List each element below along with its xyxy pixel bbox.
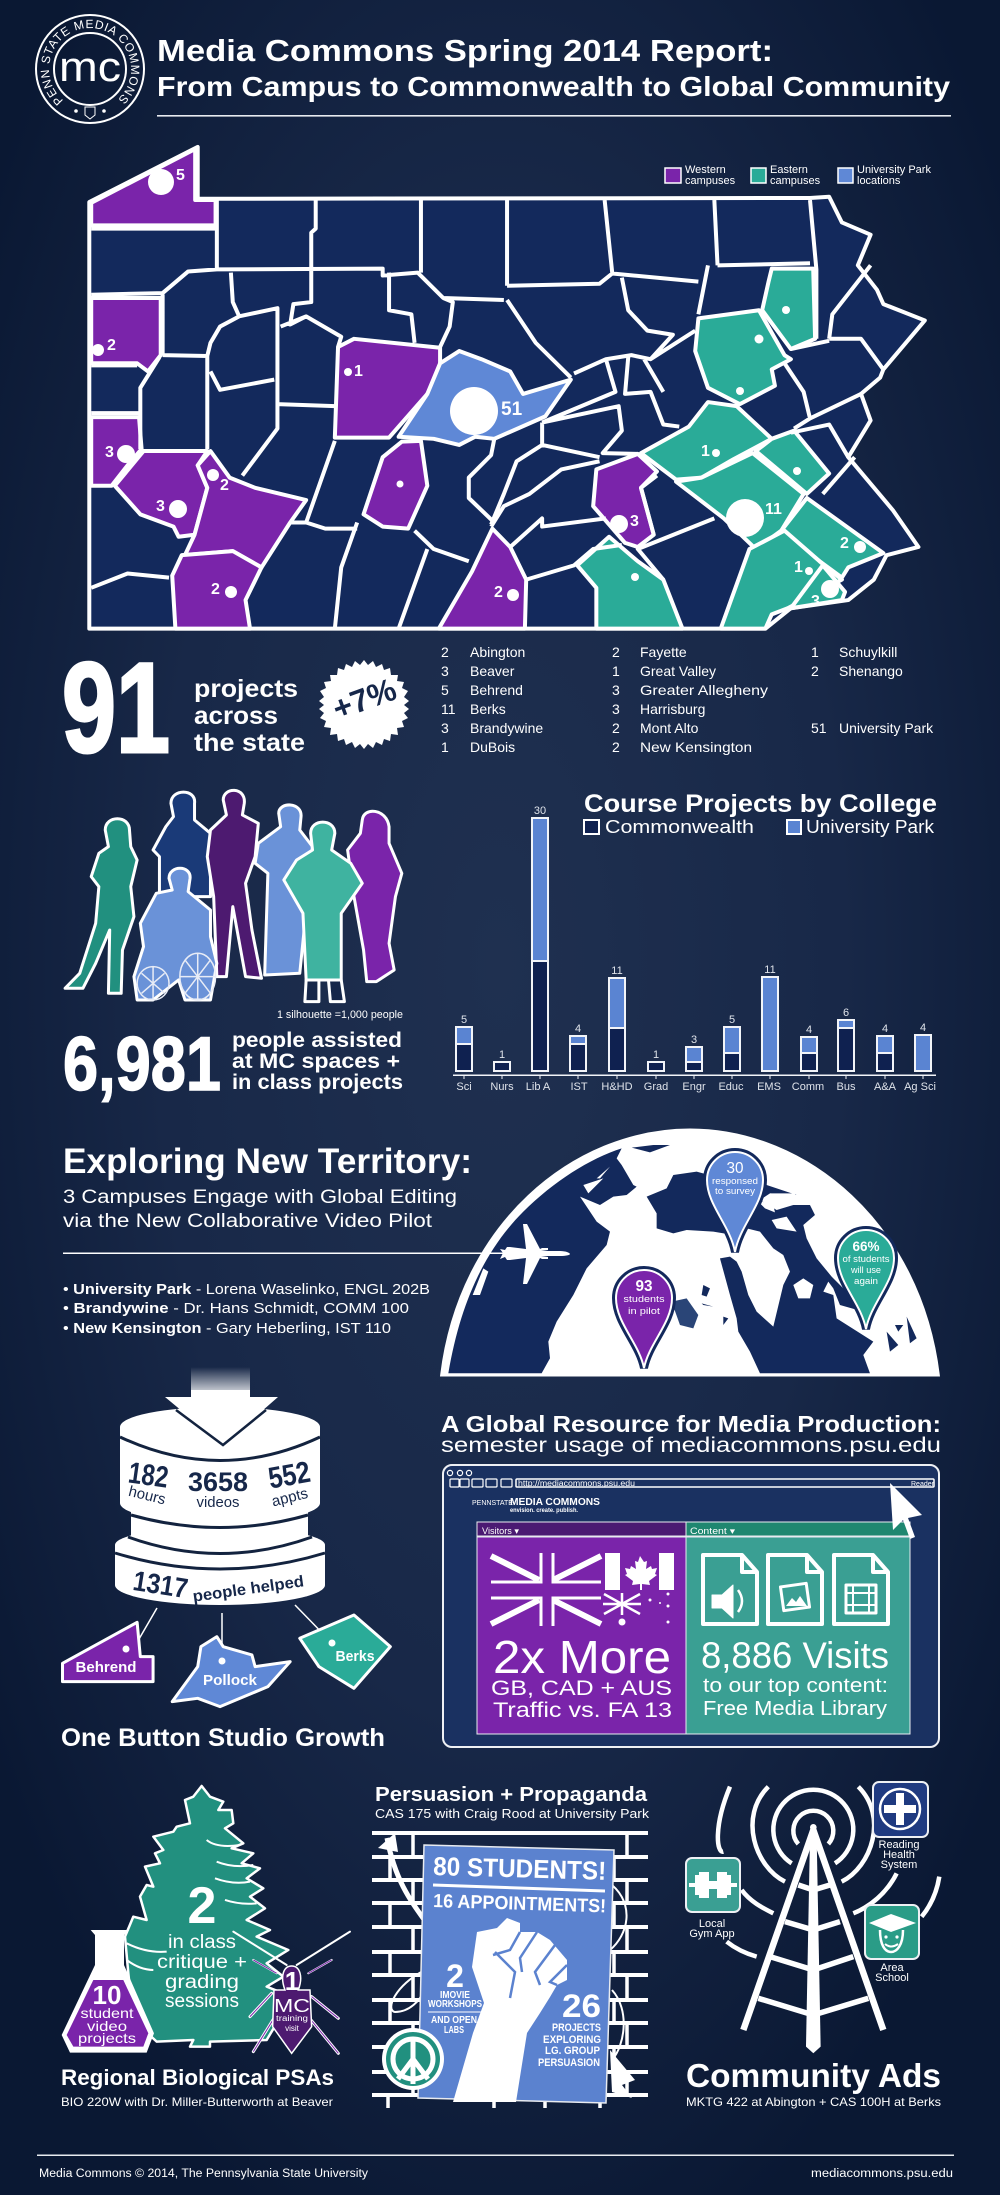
pin: 93 students in pilot: [616, 1270, 672, 1368]
stat: 6,981 people assisted: [63, 1022, 403, 1107]
campus project list: Harrisburg: [640, 701, 705, 717]
eastern campus counties: [577, 269, 883, 629]
campus project list: Mont Alto: [640, 720, 699, 736]
map markers and project counts: 3: [630, 513, 639, 530]
bar chart: course projects by college: 1: [653, 1049, 659, 1061]
one button studio stacked cylinder: people helped: [192, 1573, 305, 1606]
map markers and project counts: 51: [501, 399, 523, 420]
poster: 80 students, 16 appointments: PERSUASION: [538, 2057, 600, 2069]
campus project list: Fayette: [640, 644, 687, 660]
bar chart: course projects by college: [453, 805, 936, 1093]
flask: 10 student video projects: projects: [78, 2030, 136, 2046]
campus project list: Abington: [470, 644, 525, 660]
map markers and project counts: 1: [794, 559, 803, 576]
bar chart: course projects by college: Educ: [718, 1081, 744, 1093]
stat: 6,981 people assisted: at MC spaces +: [232, 1050, 400, 1073]
bar chart: course projects by college: 4: [806, 1024, 812, 1036]
campus project list: 11: [441, 701, 456, 717]
bar chart: course projects by college: Engr: [682, 1081, 706, 1093]
icon: local gym app: Local: [699, 1918, 725, 1930]
content panel: Free Media Library: [703, 1698, 887, 1720]
visitors tab: [477, 1522, 686, 1536]
bar chart: course projects by college: A&A: [874, 1081, 897, 1093]
poster: 80 students, 16 appointments: LABS: [444, 2025, 464, 2036]
browser window: envision. create. publish.: [510, 1508, 578, 1514]
campus project list: 2: [612, 720, 620, 736]
heading: Persuasion + Propaganda: CAS 175 with Craig Rood at University Park: [375, 1806, 650, 1821]
studio locations: Behrend, Pollock, Berks: Behrend: [76, 1659, 136, 1676]
bar chart: course projects by college: Ag Sci: [904, 1081, 936, 1093]
bar chart: course projects by college: 11: [611, 965, 623, 977]
chart heading and legend: Course Projects by College: [584, 790, 937, 818]
cursor: [890, 1483, 922, 1539]
flask: 10 student video projects: [62, 1930, 154, 2053]
campus project list: 51: [811, 720, 827, 736]
map legend: campuses: [685, 175, 736, 187]
western campus counties: [91, 149, 657, 629]
poster: 80 students, 16 appointments: EXPLORING: [543, 2034, 601, 2046]
bar chart: course projects by college: 4: [882, 1023, 888, 1035]
heading: A Global Resource for Media Production: [441, 1411, 941, 1457]
bar chart: course projects by college: 30: [534, 805, 546, 817]
pin: 93 students in pilot: in pilot: [628, 1306, 661, 1316]
beetle: 1 MC training visit: 1: [285, 1966, 299, 1996]
icon: local gym app: [686, 1858, 740, 1940]
radio tower with signal arcs: [718, 1787, 939, 2053]
map markers and project counts: 5: [176, 167, 185, 184]
tree with text: 2 in class critique + grading sessions: sessions: [165, 1991, 239, 2012]
icon: peace sticker: [382, 2028, 444, 2090]
stat: 91 projects: 91: [62, 637, 170, 780]
bar chart: course projects by college: 6: [843, 1007, 849, 1019]
state base: [89, 147, 925, 629]
campus project list: 3: [441, 663, 449, 679]
heading: Exploring New Territory: 3 Campuses Engage with Global Editing: [63, 1187, 457, 1208]
browser window: http://mediacommons.psu.edu: [518, 1479, 635, 1488]
map markers and project counts: 2: [211, 581, 220, 598]
beetle: 1 MC training visit: visit: [285, 2024, 300, 2033]
bar chart: course projects by college: 5: [729, 1014, 735, 1026]
campus project list: Greater Allegheny: [640, 682, 768, 698]
flask: 10 student video projects: 10: [93, 1980, 121, 2010]
bar chart: course projects by college: 1: [499, 1049, 505, 1061]
campus project list: Shenango: [839, 663, 903, 679]
bar chart: course projects by college: EMS: [757, 1081, 781, 1093]
campus project list: 2: [612, 739, 620, 755]
campus project list: 1: [811, 644, 819, 660]
University Park county: [399, 351, 571, 445]
heading: Persuasion + Propaganda: [375, 1784, 650, 1821]
flask: 10 student video projects: student: [80, 2005, 134, 2021]
title: [157, 33, 951, 117]
heading: Regional Biological PSAs: Regional Biological PSAs: [61, 2065, 334, 2090]
visitors panel: [477, 1537, 686, 1734]
bar chart: course projects by college: 5: [461, 1014, 467, 1026]
map legend: Western: [685, 164, 726, 176]
icon: area school: [865, 1905, 919, 1984]
heading: Community Ads: MKTG 422 at Abington + CAS 100H at Berks: [686, 2095, 941, 2109]
pin: 30 responded to survey: [707, 1152, 763, 1252]
heading: Exploring New Territory: via the New Collaborative Video Pilot: [63, 1211, 433, 1232]
map markers and project counts: 2: [107, 337, 116, 354]
poster: 80 students, 16 appointments: 2: [446, 1958, 464, 1994]
map markers and project counts: 1: [701, 443, 710, 460]
campus project list: 2: [612, 644, 620, 660]
bar chart: course projects by college: Sci: [456, 1081, 472, 1093]
poster: 80 students, 16 appointments: LG. GROUP: [545, 2045, 600, 2057]
map markers and project counts: 2: [840, 535, 849, 552]
bar chart: course projects by college: Comm: [792, 1081, 824, 1093]
tree with text: 2 in class critique + grading sessions: grading: [165, 1972, 239, 1993]
stat: 91 projects: the state: [194, 729, 305, 757]
campus project list: Beaver: [470, 663, 515, 679]
poster: 80 students, 16 appointments: 80 STUDENTS!: [433, 1851, 607, 1886]
campus project list: 3: [441, 720, 449, 736]
campus project list: 1: [441, 739, 449, 755]
one button studio stacked cylinder: 182: [126, 1456, 170, 1495]
one button studio stacked cylinder: 1317: [131, 1565, 190, 1604]
heading: A Global Resource for Media Production: semester usage of mediacommons.psu.edu: [441, 1434, 941, 1457]
pilot campus list: • Brandywine - Dr. Hans Schmidt, COMM 100: [63, 1300, 409, 1317]
bar chart: course projects by college: 4: [920, 1022, 926, 1034]
campus project list: 3: [612, 701, 620, 717]
chart heading and legend: University Park: [806, 817, 935, 837]
poster: 80 students, 16 appointments: 26: [562, 1988, 601, 2024]
visitors panel: GB, CAD + AUS: [491, 1677, 672, 1700]
silhouettes of people: [65, 790, 402, 1002]
pin: 93 students in pilot: students: [624, 1294, 665, 1304]
campus project list: Behrend: [470, 682, 523, 698]
map markers and project counts: 2: [494, 584, 503, 601]
icon: airplane and flight line: [63, 1224, 570, 1284]
one button studio stacked cylinder: videos: [196, 1494, 240, 1511]
flask: 10 student video projects: video: [87, 2018, 127, 2034]
bar chart: course projects by college: Nurs: [490, 1081, 514, 1093]
icon: reading health system: Reading: [879, 1839, 919, 1851]
map legend: [665, 164, 931, 187]
icon: local gym app: Gym App: [689, 1928, 735, 1940]
arrow into cylinder: [165, 1390, 278, 1445]
pilot campus list: • University Park - Lorena Waselinko, ENGL 202B: [63, 1281, 430, 1298]
one button studio stacked cylinder: 3658: [188, 1467, 248, 1497]
beetle: 1 MC training visit: MC: [274, 1996, 310, 2016]
campus project list: Brandywine: [470, 720, 543, 736]
map legend: locations: [857, 175, 901, 187]
content panel: to our top content:: [703, 1675, 888, 1697]
bar chart: course projects by college: IST: [570, 1081, 588, 1093]
heading: Regional Biological PSAs: BIO 220W with Dr. Miller-Butterworth at Beaver: [61, 2095, 333, 2109]
studio locations: Behrend, Pollock, Berks: Pollock: [203, 1672, 258, 1689]
pin: 66% of students will use again: [838, 1230, 894, 1329]
chart heading and legend: [584, 790, 937, 837]
one button studio stacked cylinder: appts: [270, 1485, 310, 1510]
tree with text: 2 in class critique + grading sessions: critique +: [157, 1952, 247, 1973]
pin: 93 students in pilot: 93: [636, 1278, 653, 1295]
logo: Penn State Media Commons seal: PENN STATE MEDIA COMMONS: [40, 20, 140, 106]
browser window: Content ▾: [690, 1526, 736, 1536]
poster: 80 students, 16 appointments: PROJECTS: [552, 2022, 601, 2034]
stat: 6,981 people assisted: 6,981: [63, 1022, 221, 1107]
badge: +7%: +7%: [328, 671, 401, 727]
poster: 80 students, 16 appointments: [418, 1845, 614, 2103]
bar chart: course projects by college: 4: [575, 1023, 581, 1035]
silhouette scale note: 1 silhouette =1,000 people: [277, 1009, 403, 1021]
chart heading and legend: Commonwealth: [605, 817, 754, 837]
poster: 80 students, 16 appointments: WORKSHOPS: [428, 1999, 482, 2010]
browser window: PENNSTATE: [472, 1500, 513, 1507]
title: From Campus to Commonwealth to Global Community: [157, 71, 950, 102]
pin: 66% of students will use again: 66%: [852, 1238, 880, 1254]
campus project list: Berks: [470, 701, 506, 717]
pin: 30 responded to survey: 30: [726, 1160, 744, 1177]
campus project list: New Kensington: [640, 739, 752, 755]
campus project list: 2: [441, 644, 449, 660]
beetle: 1 MC training visit: [233, 1932, 350, 2053]
campus project list: Great Valley: [640, 663, 716, 679]
campus project list: [441, 644, 934, 755]
stat: 91 projects: across: [194, 702, 278, 730]
map legend: campuses: [770, 175, 821, 187]
footer: mediacommons.psu.edu: [811, 2168, 953, 2180]
bar chart: course projects by college: 3: [691, 1034, 697, 1046]
pin: 66% of students will use again: of students: [842, 1254, 890, 1264]
stat: 91 projects: [62, 637, 305, 780]
map markers and project counts: 3: [811, 593, 820, 610]
stat: 91 projects: projects: [194, 675, 298, 703]
campus project list: 2: [811, 663, 819, 679]
icon: raised fist: [453, 1918, 567, 2102]
tree with text: 2 in class critique + grading sessions: in class: [168, 1932, 236, 1953]
content panel: 8,886 Visits: [701, 1635, 889, 1676]
icon: area school: School: [875, 1972, 909, 1984]
heading: Exploring New Territory: [63, 1142, 472, 1232]
browser window: MEDIA COMMONS: [510, 1497, 600, 1508]
content panel: [686, 1537, 910, 1734]
beetle: 1 MC training visit: training: [276, 2014, 308, 2023]
one button studio stacked cylinder: hours: [127, 1483, 167, 1508]
map markers and project counts: 2: [220, 477, 229, 494]
pin: 66% of students will use again: will use: [850, 1265, 881, 1275]
brick wall with graffiti: [372, 1833, 648, 2108]
pin: 30 responded to survey: responsed: [712, 1176, 758, 1186]
globe: [442, 1130, 938, 1375]
map legend: University Park: [857, 164, 931, 176]
bar chart: course projects by college: Bus: [837, 1081, 856, 1093]
footer: [37, 2154, 954, 2180]
poster: 80 students, 16 appointments: IMOVIE: [440, 1990, 470, 2001]
visitors panel: 2x More: [493, 1631, 671, 1683]
visitors panel: Traffic vs. FA 13: [493, 1699, 672, 1722]
bar chart: course projects by college: H&HD: [601, 1081, 633, 1093]
bar chart: course projects by college: Grad: [644, 1081, 668, 1093]
pin: 66% of students will use again: again: [854, 1276, 878, 1286]
campus project list: DuBois: [470, 739, 515, 755]
stat: 6,981 people assisted: people assisted: [232, 1029, 402, 1052]
map legend: Eastern: [770, 164, 808, 176]
bar chart: course projects by college: Lib A: [526, 1081, 551, 1093]
map markers and project counts: 3: [105, 444, 114, 461]
campus project list: 1: [612, 663, 620, 679]
badge: +7%: [319, 660, 409, 749]
heading: One Button Studio Growth: One Button Studio Growth: [61, 1724, 385, 1752]
content tab: [686, 1522, 910, 1536]
icon: area school: Area: [880, 1962, 904, 1974]
studio locations: Behrend, Pollock, Berks: Berks: [336, 1648, 374, 1665]
one button studio stacked cylinder: [115, 1367, 325, 1606]
campus project list: 5: [441, 682, 449, 698]
icon: reading health system: Health: [883, 1849, 915, 1861]
heading: Community Ads: Community Ads: [686, 2057, 941, 2094]
one button studio stacked cylinder: 552: [266, 1456, 313, 1496]
poster: 80 students, 16 appointments: 16 APPOINTMENTS!: [433, 1891, 606, 1917]
stat: 6,981 people assisted: in class projects: [232, 1071, 403, 1094]
icon: reading health system: [873, 1782, 928, 1871]
map markers and project counts: 1: [354, 363, 363, 380]
studio locations: Behrend, Pollock, Berks: [63, 1605, 390, 1707]
tree with text: 2 in class critique + grading sessions: [125, 1786, 288, 2047]
heading: Persuasion + Propaganda: Persuasion + Propaganda: [375, 1784, 648, 1806]
icon: reading health system: System: [881, 1859, 917, 1871]
map markers and project counts: [92, 167, 866, 610]
map markers and project counts: 3: [156, 498, 165, 515]
bar chart: course projects by college: 11: [764, 964, 776, 976]
browser window: Visitors ▾: [482, 1526, 519, 1536]
poster: 80 students, 16 appointments: AND OPEN: [431, 2015, 477, 2026]
title: Media Commons Spring 2014 Report:: [157, 33, 773, 68]
footer: Media Commons © 2014, The Pennsylvania State University: [39, 2168, 368, 2180]
tree with text: 2 in class critique + grading sessions: 2: [188, 1877, 216, 1935]
heading: Exploring New Territory: Exploring New Territory:: [63, 1142, 472, 1181]
campus project list: 3: [612, 682, 620, 698]
map: Pennsylvania counties: [89, 147, 925, 629]
browser window: Reader: [911, 1481, 935, 1488]
pilot campus list: • New Kensington - Gary Heberling, IST 110: [63, 1320, 391, 1337]
pilot campus list: [63, 1281, 430, 1337]
logo: Penn State Media Commons seal: mc: [59, 43, 121, 90]
browser window: [443, 1465, 939, 1747]
campus project list: University Park: [839, 720, 934, 736]
map markers and project counts: 11: [765, 501, 782, 518]
pin: 30 responded to survey: to survey: [715, 1186, 756, 1196]
heading: Regional Biological PSAs: [61, 2065, 334, 2109]
campus project list: Schuylkill: [839, 644, 897, 660]
heading: A Global Resource for Media Production: A Global Resource for Media Production:: [441, 1411, 941, 1437]
